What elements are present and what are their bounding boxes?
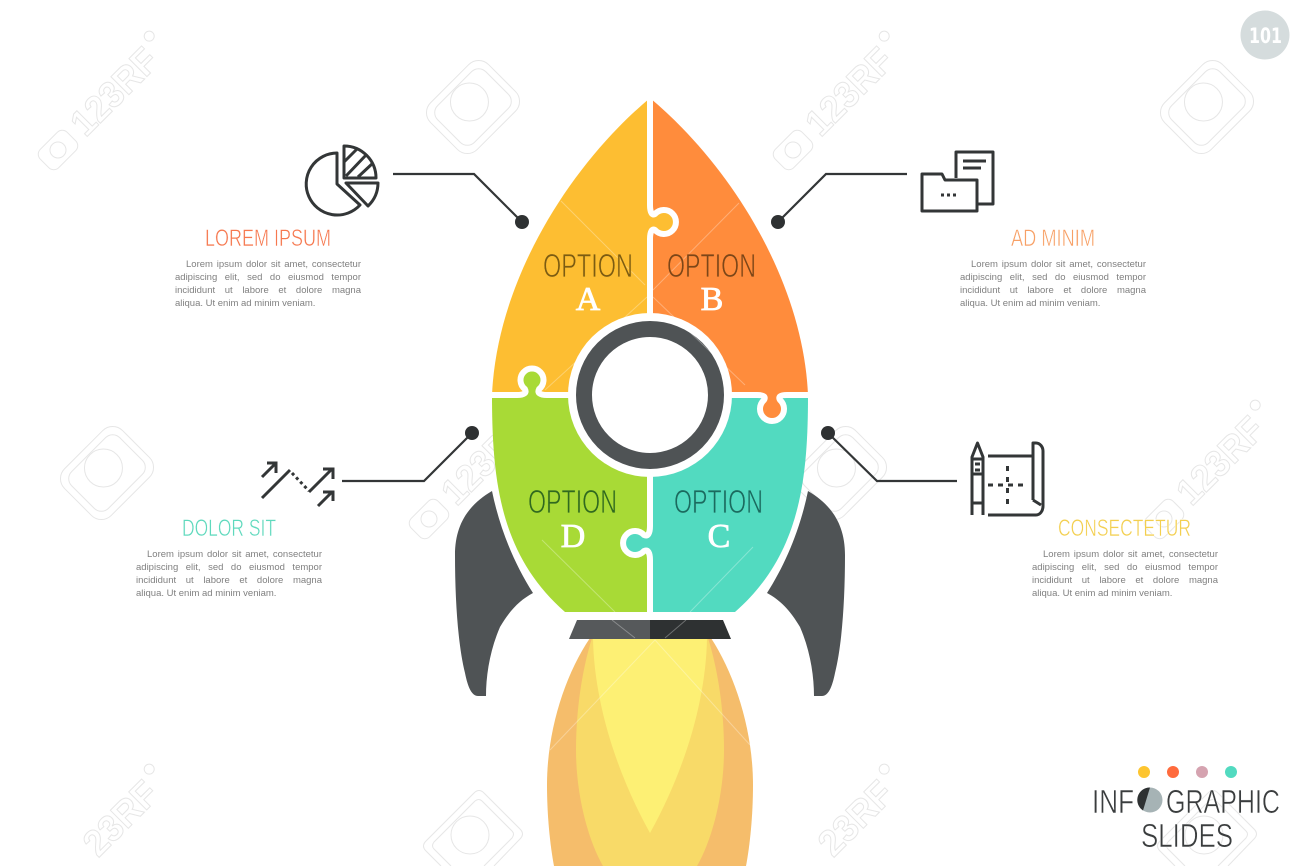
panel: option D xyxy=(492,395,650,612)
panel: option B xyxy=(650,98,808,395)
logo: infographic slides: INF xyxy=(1092,783,1134,820)
label: option A xyxy=(543,247,633,318)
label: option D: OPTION xyxy=(528,483,617,520)
text block: lorem ipsum: adipiscing elit, sed do eiusmod tempor xyxy=(175,272,361,283)
page number badge: 101 xyxy=(1249,24,1282,48)
flame xyxy=(547,638,753,866)
rocket nozzle xyxy=(569,620,731,639)
label: option A: OPTION xyxy=(543,247,633,284)
text block: consectetur: adipiscing elit, sed do eiusmod tempor xyxy=(1032,562,1218,573)
text block: dolor sit: Lorem ipsum dolor sit amet, consectetur xyxy=(147,549,322,560)
logo: infographic slides xyxy=(1092,766,1280,854)
heading: lorem ipsum: LOREM IPSUM xyxy=(205,225,331,252)
text block: lorem ipsum: incididunt ut labore et dolore magna xyxy=(175,285,361,296)
text block: ad minim: aliqua. Ut enim ad minim veniam. xyxy=(960,298,1100,309)
watermarks: 123RF xyxy=(1168,409,1272,513)
text block: lorem ipsum: Lorem ipsum dolor sit amet, consectetur xyxy=(186,259,361,270)
text block: dolor sit: aliqua. Ut enim ad minim veniam. xyxy=(136,588,276,599)
puzzle tabs xyxy=(488,96,812,615)
watermarks: 123RF xyxy=(433,409,537,513)
text block: ad minim xyxy=(960,259,1146,309)
icon: pencil and blueprint xyxy=(972,443,1043,515)
connector: option C xyxy=(821,426,957,481)
icon: folder and document xyxy=(922,152,993,211)
panel: option C xyxy=(650,395,808,612)
text block: dolor sit: incididunt ut labore et dolore magna xyxy=(136,575,322,586)
text block: ad minim: adipiscing elit, sed do eiusmod tempor xyxy=(960,272,1146,283)
text block: dolor sit: adipiscing elit, sed do eiusmod tempor xyxy=(136,562,322,573)
label: option B: B xyxy=(701,281,723,318)
heading: consectetur: CONSECTETUR xyxy=(1058,515,1191,542)
connector: option A xyxy=(393,174,529,229)
icon: growth arrows xyxy=(262,463,333,506)
text block: dolor sit xyxy=(136,549,322,599)
text block: consectetur xyxy=(1032,549,1218,599)
label: option B xyxy=(667,247,756,318)
panel: option A xyxy=(492,98,650,395)
text block: consectetur: incididunt ut labore et dolore magna xyxy=(1032,575,1218,586)
label: option B: OPTION xyxy=(667,247,756,284)
heading: ad minim: AD MINIM xyxy=(1011,225,1095,252)
watermarks: 23RF xyxy=(75,773,166,864)
label: option D: D xyxy=(561,518,585,555)
icon: pie chart xyxy=(306,146,378,215)
connector: option D xyxy=(342,426,479,481)
watermarks: 123RF xyxy=(62,40,166,144)
text block: ad minim: Lorem ipsum dolor sit amet, consectetur xyxy=(971,259,1146,270)
text block: consectetur: aliqua. Ut enim ad minim veniam. xyxy=(1032,588,1172,599)
porthole xyxy=(568,313,732,477)
right fin xyxy=(767,491,845,696)
text block: consectetur: Lorem ipsum dolor sit amet, consectetur xyxy=(1043,549,1218,560)
page number badge xyxy=(1240,10,1290,60)
label: option D xyxy=(528,483,617,555)
text block: lorem ipsum: aliqua. Ut enim ad minim veniam. xyxy=(175,298,315,309)
label: option C: C xyxy=(708,518,730,555)
label: option A: A xyxy=(576,281,601,318)
heading: dolor sit: DOLOR SIT xyxy=(182,515,276,542)
connector: option B xyxy=(771,174,907,229)
text block: ad minim: incididunt ut labore et dolore magna xyxy=(960,285,1146,296)
text block: lorem ipsum xyxy=(175,259,361,309)
watermarks: 123RF xyxy=(797,40,901,144)
watermarks: 23RF xyxy=(810,773,901,864)
left fin xyxy=(455,491,533,696)
label: option C xyxy=(674,483,763,555)
label: option C: OPTION xyxy=(674,483,763,520)
logo: infographic slides: SLIDES xyxy=(1141,817,1233,854)
